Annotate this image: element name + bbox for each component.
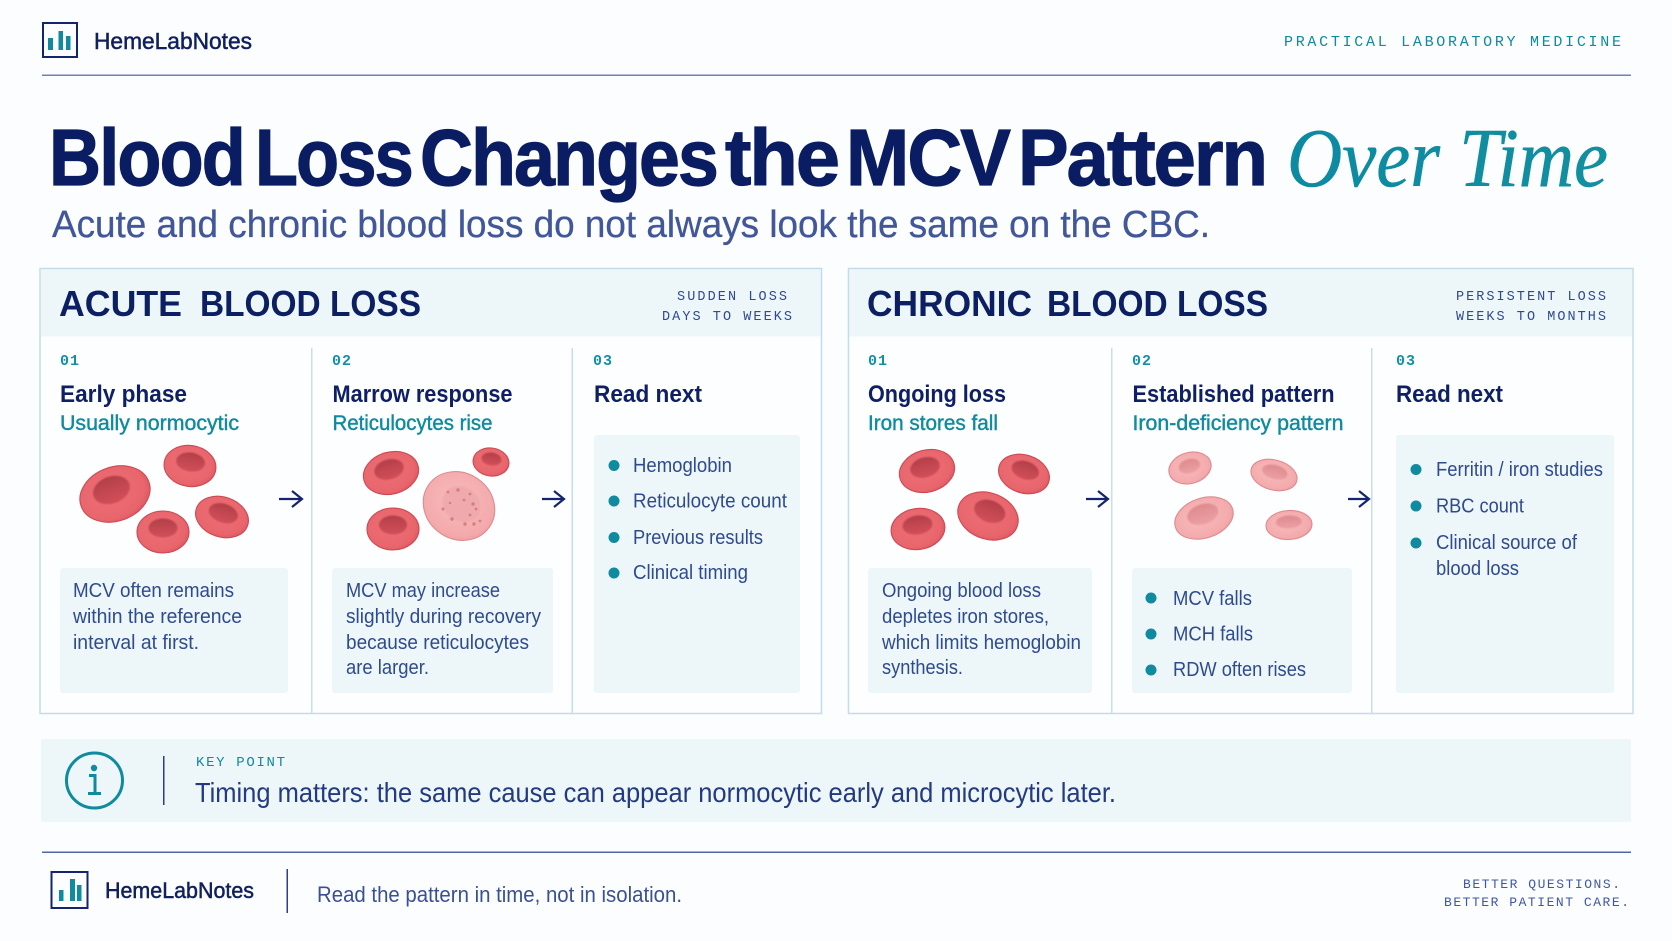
indices list: MCH falls [1173,622,1253,646]
arrow [1086,491,1108,507]
note: are larger. [346,656,429,679]
chronic panel header: PERSISTENT LOSS [1456,290,1606,305]
step: established pattern: 02 [1132,353,1151,370]
step: early phase: 01 [60,353,79,370]
note: which limits hemoglobin [881,631,1081,654]
checklist: RBC count [1436,494,1524,518]
footer brand name: HemeLabNotes [105,878,254,903]
chronic panel header: CHRONIC [867,283,1032,324]
title: Over Time [1287,112,1608,205]
footer tagline [1444,877,1629,910]
note [60,568,288,693]
title: Pattern [1018,113,1266,202]
title [49,112,1608,205]
header [42,23,1631,76]
step: early phase: Usually normocytic [60,412,239,435]
checklist: Clinical timing [633,561,748,584]
arrow [542,491,564,507]
icon: info [66,753,122,808]
indices list: MCV falls [1173,587,1252,610]
chronic panel header [850,270,1632,336]
title: Changes [420,113,717,202]
header rule [42,74,1631,76]
step: read next (acute): Read next [594,381,702,408]
red cells with large reticulocyte [359,445,511,554]
step: read next (chronic): Read next [1396,381,1503,408]
note: within the reference [72,605,242,628]
step: marrow response [332,353,564,693]
title: Blood [49,113,244,202]
checklist: Hemoglobin [633,454,732,477]
tagline: PRACTICAL LABORATORY MEDICINE [1284,34,1621,51]
step: ongoing loss: Ongoing loss [868,381,1006,408]
footer tagline: BETTER PATIENT CARE. [1444,895,1629,910]
note [332,568,553,693]
checklist [594,435,800,693]
step: read next (chronic) [1396,353,1614,693]
arrow [1348,491,1369,507]
chronic panel header: WEEKS TO MONTHS [1456,310,1606,325]
step: read next (chronic): 03 [1396,353,1415,370]
step: established pattern: Established pattern [1132,381,1334,408]
acute panel header: SUDDEN LOSS [677,290,787,305]
checklist [1396,435,1614,693]
note [868,568,1092,693]
step: established pattern: Iron-deficiency pattern [1132,412,1344,435]
acute panel header: BLOOD LOSS [200,283,421,324]
step: ongoing loss: 01 [868,353,887,370]
key point bar [41,739,1631,822]
note: interval at first. [73,631,199,654]
chronic panel header: BLOOD LOSS [1047,283,1268,324]
acute panel header: ACUTE [59,283,182,324]
step: marrow response: 02 [332,353,351,370]
step: early phase [60,353,302,693]
step: ongoing loss [868,353,1108,693]
brand name: HemeLabNotes [94,28,252,54]
note: because reticulocytes [346,631,529,654]
step: ongoing loss: Iron stores fall [868,412,998,435]
title: the [725,113,838,202]
footer [42,852,1631,913]
title: Loss [255,113,412,202]
note: synthesis. [882,656,963,679]
checklist: Reticulocyte count [633,490,787,512]
note: Ongoing blood loss [882,579,1041,602]
footer logo icon [52,872,88,908]
pale small red cells [1165,447,1313,546]
note: slightly during recovery [346,605,542,628]
step: read next (acute) [593,353,800,693]
arrow [279,491,302,507]
step: read next (acute): 03 [593,353,612,370]
note: depletes iron stores, [882,605,1049,628]
subtitle: Acute and chronic blood loss do not always look the same on the CBC. [52,204,1210,246]
checklist: Previous results [633,526,763,549]
panel: acute blood loss [40,268,822,714]
red cells: mixed size [888,443,1055,553]
step: established pattern [1132,353,1369,693]
indices list: RDW often rises [1173,658,1306,681]
footer tagline: BETTER QUESTIONS. [1463,877,1620,892]
note: MCV may increase [346,579,500,602]
key point text: Timing matters: the same cause can appear normocytic early and microcytic later. [195,777,1116,808]
acute panel header [41,270,820,336]
logo icon [43,23,77,57]
key point label: KEY POINT [196,755,285,771]
checklist: Clinical source of [1436,531,1577,554]
title: MCV [846,113,1011,202]
red cells: normal size [72,442,254,553]
checklist: Ferritin / iron studies [1436,458,1603,481]
step: marrow response: Marrow response [332,381,512,408]
note: MCV often remains [73,579,234,602]
footer message: Read the pattern in time, not in isolation. [317,882,682,907]
checklist: blood loss [1436,557,1519,580]
step: early phase: Early phase [60,381,187,408]
step: marrow response: Reticulocytes rise [332,412,492,435]
indices list [1132,568,1352,693]
acute panel header: DAYS TO WEEKS [662,310,792,325]
panel: chronic blood loss [848,268,1633,714]
